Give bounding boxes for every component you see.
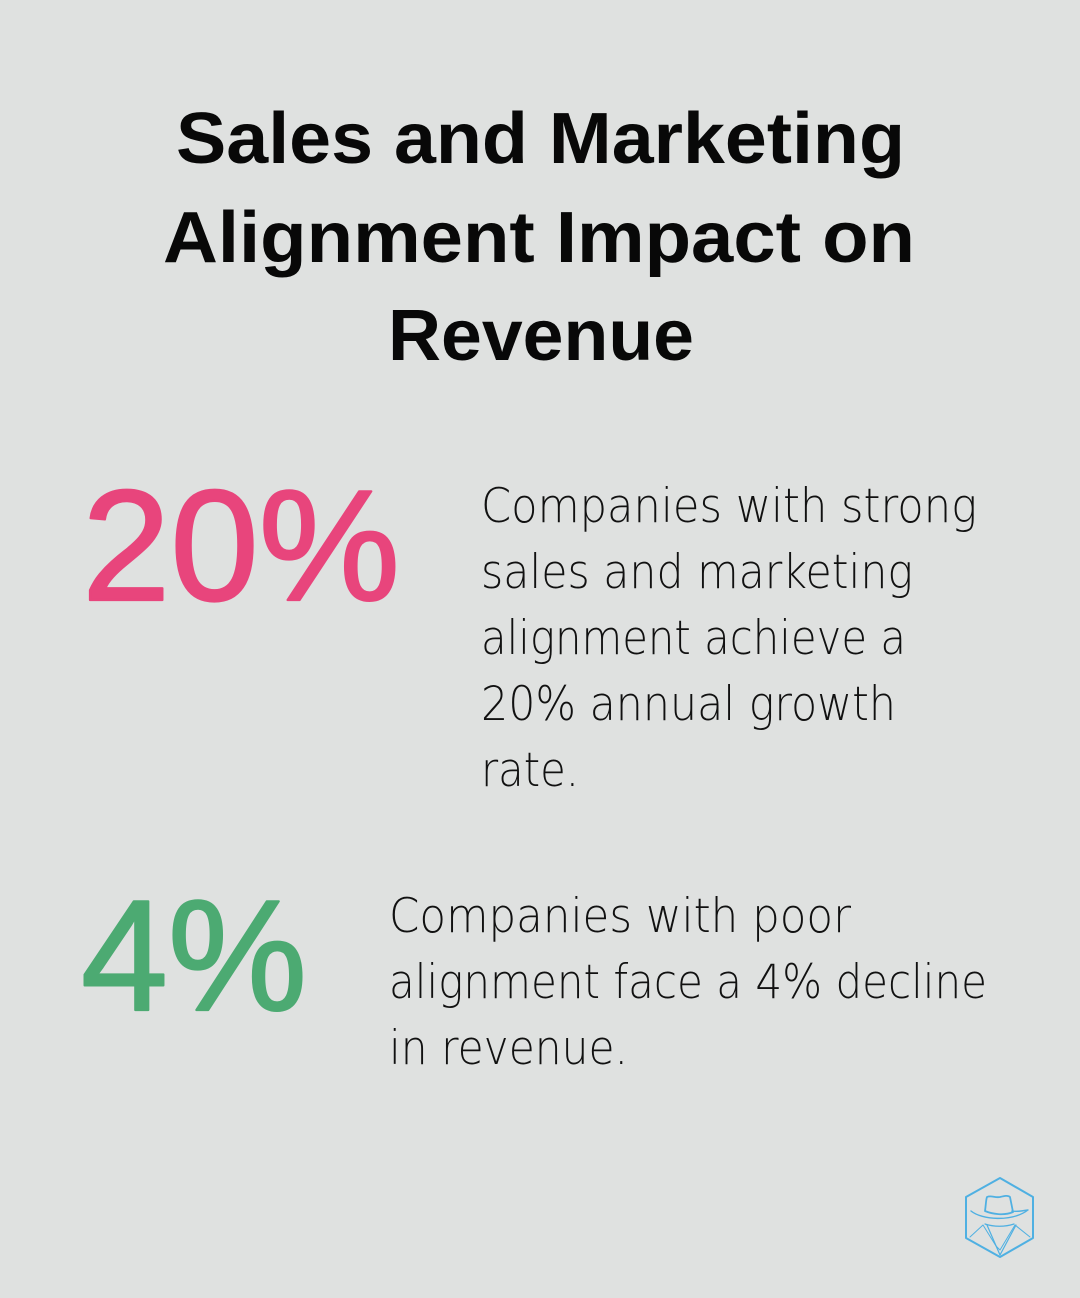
text: strong alignment description: sales and marketing xyxy=(481,545,913,600)
text: strong alignment description xyxy=(481,479,977,798)
text: poor alignment description: in revenue. xyxy=(389,1021,628,1076)
title xyxy=(163,99,915,376)
text: strong alignment description: Companies with strong xyxy=(481,479,977,534)
title: Alignment Impact on xyxy=(163,198,915,278)
icon: hexagon logo with hat and collar xyxy=(966,1178,1033,1257)
stat: 4%: 4% xyxy=(81,868,307,1044)
text: strong alignment description: 20% annual growth xyxy=(481,677,896,732)
text: strong alignment description: rate. xyxy=(481,743,579,798)
stat: 20%: 20% xyxy=(82,458,400,634)
title: Revenue xyxy=(388,296,694,376)
title: Sales and Marketing xyxy=(176,99,905,179)
text: poor alignment description: Companies with poor xyxy=(389,889,852,944)
text: strong alignment description: alignment achieve a xyxy=(481,611,906,666)
text: poor alignment description: alignment face a 4% decline xyxy=(389,955,987,1010)
text: poor alignment description xyxy=(389,889,987,1076)
